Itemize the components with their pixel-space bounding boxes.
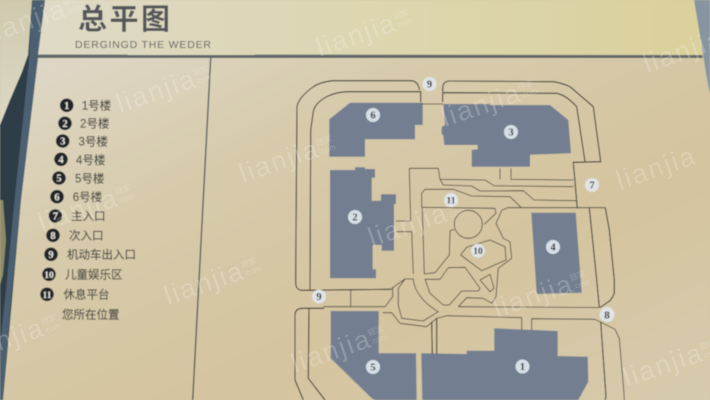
- watermark 9: lianjia: [364, 197, 452, 253]
- marker 7: [585, 178, 599, 192]
- watermark 8: 链家: [516, 77, 535, 92]
- marker 9 west: [312, 290, 326, 304]
- watermark 14: lianjia: [619, 337, 707, 393]
- watermark 8: .com: [520, 86, 539, 100]
- panel divider: [193, 58, 211, 400]
- marker 8: [600, 307, 614, 322]
- header band: [38, 0, 703, 55]
- watermark 7: .com: [395, 16, 414, 30]
- legend item 2: 2: [62, 119, 68, 130]
- watermark 5: [0, 307, 64, 368]
- watermark 6: 链家: [314, 133, 333, 148]
- marker 4: 4: [550, 243, 556, 254]
- watermark 5: 链家: [39, 312, 58, 327]
- legend item 5: [52, 171, 105, 186]
- ring road south: [295, 287, 624, 400]
- legend item 8: 次入口: [69, 228, 104, 242]
- header rule: [38, 54, 703, 58]
- watermark 9: .com: [447, 206, 466, 220]
- legend item 6: [50, 190, 103, 204]
- ring road east: [458, 208, 614, 308]
- legend item 4: 4号楼: [76, 153, 106, 167]
- legend item 11: 11: [43, 291, 52, 301]
- building 3: [442, 104, 571, 167]
- marker 3: [504, 125, 518, 139]
- watermark 2: .com: [195, 72, 214, 86]
- legend item 3: [56, 134, 108, 148]
- watermark 8: lianjia: [437, 77, 525, 133]
- watermark 2: lianjia: [112, 63, 200, 119]
- legend item 3: 3: [60, 137, 65, 148]
- marker 4: [546, 240, 560, 254]
- legend item 8: [46, 228, 104, 242]
- watermark 4: .com: [243, 264, 262, 278]
- watermark 1: .com: [65, 2, 84, 16]
- marker 10: [471, 244, 485, 258]
- marker 9 north: [422, 77, 436, 91]
- watermark 10: lianjia: [287, 323, 375, 379]
- legend item 7: [48, 209, 106, 223]
- legend item 4: 4: [58, 155, 64, 166]
- subtitle: DERGINGD THE WEDER: [75, 39, 211, 51]
- legend item 5: 5: [56, 174, 62, 185]
- legend item 1: 1号楼: [82, 98, 112, 112]
- inner paths: [383, 168, 576, 354]
- legend item 9: [44, 248, 136, 262]
- watermark 10: 链家: [366, 323, 385, 338]
- legend item 10: [42, 268, 123, 282]
- legend item 6: 6: [54, 192, 60, 203]
- watermark 12: lianjia: [612, 140, 700, 196]
- legend item 2: 2号楼: [80, 116, 110, 130]
- marker 7: 7: [589, 181, 595, 192]
- watermark 11: lianjia: [489, 268, 577, 324]
- marker 8: 8: [604, 309, 610, 321]
- marker 11: 11: [447, 196, 456, 206]
- watermark 3: .com: [117, 191, 136, 205]
- watermark 3: 链家: [113, 182, 132, 197]
- watermark 2: 链家: [191, 63, 210, 78]
- watermark 4: 链家: [239, 255, 258, 270]
- building 5: [331, 311, 417, 400]
- legend item 3: 3号楼: [78, 134, 108, 148]
- legend item 10: 10: [44, 271, 54, 281]
- legend item 11: [40, 288, 110, 302]
- watermark 9: 链家: [443, 197, 462, 212]
- legend item 1: [60, 98, 112, 112]
- sign frame: right edge: [690, 0, 710, 100]
- circular plaza: [454, 210, 482, 238]
- map markers: [312, 77, 614, 374]
- small garden island: [480, 274, 494, 292]
- marker 11: [444, 193, 458, 207]
- watermark 7: lianjia: [312, 7, 400, 63]
- legend item 7: 7: [53, 212, 58, 223]
- marker 2: 2: [352, 213, 358, 224]
- watermark 11: .com: [572, 277, 591, 291]
- marker 9 west: 9: [316, 292, 322, 303]
- ring road north-east: [443, 81, 601, 208]
- children's play area path: [461, 240, 506, 271]
- building 6: [329, 103, 423, 157]
- marker 1: 1: [520, 362, 525, 373]
- legend item: current location: 您所在位置: [62, 308, 120, 322]
- watermark 6: lianjia: [235, 133, 323, 189]
- marker 5: 5: [370, 363, 376, 374]
- legend item 2: [58, 116, 110, 130]
- watermark 6: .com: [318, 142, 337, 156]
- watermark 5: .com: [43, 321, 62, 335]
- legend item 8: 8: [50, 231, 56, 242]
- legend item 9: 机动车出入口: [67, 248, 136, 262]
- building 1: [421, 328, 588, 400]
- legend item 11: 休息平台: [64, 288, 110, 302]
- sign frame: dark left band: [0, 0, 60, 400]
- legend: [40, 98, 136, 322]
- watermark 10: .com: [370, 332, 389, 346]
- watermark 11: 链家: [568, 268, 587, 283]
- marker 9 north: 9: [427, 80, 432, 91]
- site map: [295, 77, 624, 400]
- marker 5: [366, 360, 380, 374]
- marker 1: [516, 360, 530, 374]
- watermark 4: lianjia: [160, 255, 248, 311]
- watermark 3: lianjia: [34, 182, 122, 238]
- building 2: [330, 167, 396, 278]
- marker 6: [366, 108, 380, 122]
- legend item 5: 5号楼: [75, 172, 105, 186]
- legend item 4: [54, 152, 106, 167]
- legend item 6: 6号楼: [73, 190, 103, 204]
- watermark 7: 链家: [391, 7, 410, 22]
- legend item 10: 儿童娱乐区: [65, 268, 122, 282]
- marker 10: 10: [473, 247, 483, 257]
- legend item 1: 1: [64, 101, 69, 112]
- legend item 9: 9: [48, 250, 54, 261]
- title: 总平图: [78, 3, 170, 36]
- marker 3: 3: [508, 128, 514, 139]
- marker 6: 6: [370, 111, 376, 122]
- building 4: [531, 213, 582, 294]
- legend item 7: 主入口: [71, 210, 106, 223]
- ring road north-west: [296, 81, 443, 290]
- marker 2: [348, 210, 362, 224]
